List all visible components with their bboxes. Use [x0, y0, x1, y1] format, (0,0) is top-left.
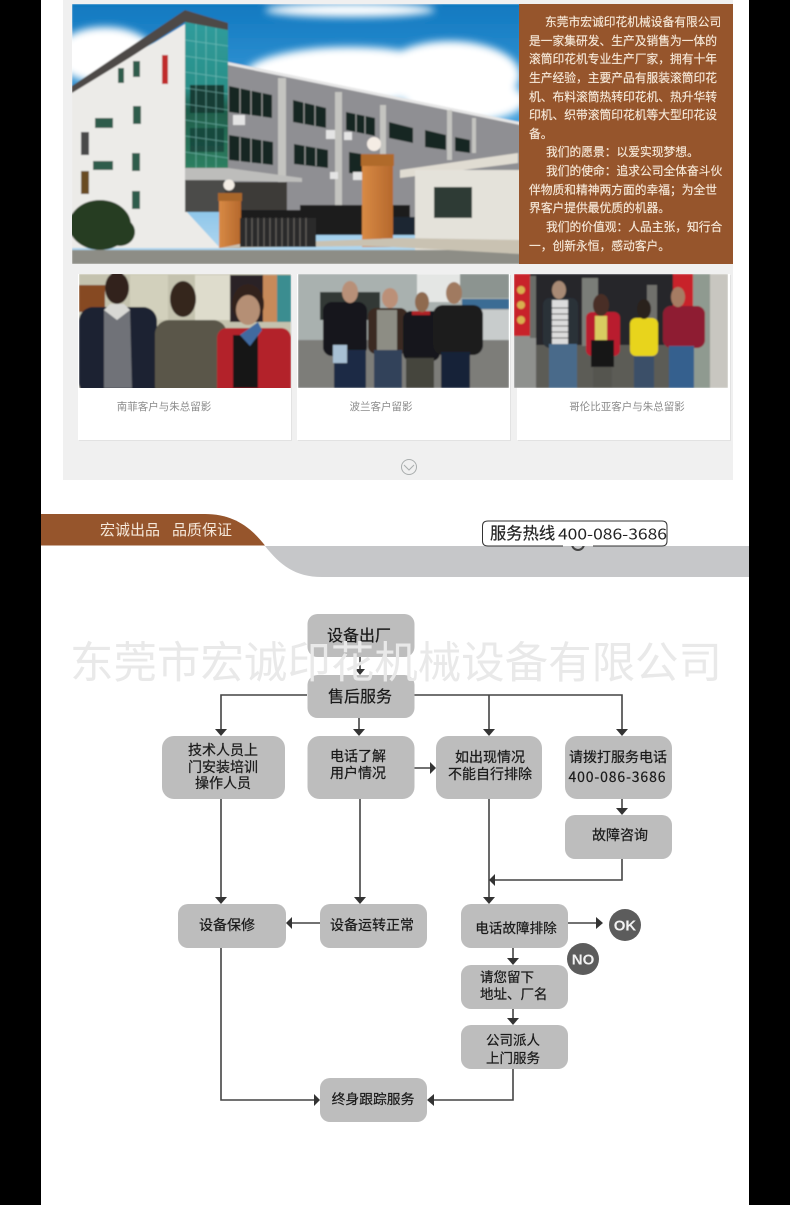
- step: call service line: 请拨打服务电话: [569, 749, 667, 765]
- flowchart: [162, 614, 672, 1122]
- panel: company text: 滚筒印花机专业生产厂家，拥有十年: [529, 52, 717, 66]
- step: fault consultation: [565, 815, 672, 859]
- step: on-site installation and training: 操作人员: [195, 775, 251, 791]
- photo: Poland customers: [298, 274, 509, 388]
- panel: company text: 生产经验，主要产品有服装滚筒印花: [529, 71, 717, 85]
- step: fault consultation: 故障咨询: [592, 827, 648, 843]
- panel: company text: 我们的价值观：人品主张，知行合: [546, 220, 722, 234]
- hotline box: 400-086-3686: [558, 524, 667, 544]
- card: South Africa customers: [78, 272, 292, 441]
- panel: company text: 印机、织带滚筒印花机等大型印花设: [529, 108, 717, 122]
- hotline box: 服务热线: [490, 525, 555, 543]
- banner: quality slogan: 品质保证: [172, 522, 232, 539]
- step: equipment warranty: [178, 904, 286, 948]
- step: call service line: 400-086-3686: [568, 767, 666, 787]
- step: unresolved problem: [436, 736, 542, 799]
- photo: South Africa customers: [79, 274, 291, 388]
- step: after-sales service: [308, 675, 414, 718]
- caption: South Africa: 南菲客户与朱总留影: [117, 400, 212, 413]
- icon: OK: [609, 909, 641, 941]
- step: phone check: [308, 736, 414, 799]
- photo: factory building: [55, 3, 525, 264]
- caption: Poland: 波兰客户留影: [350, 400, 413, 413]
- step: equipment running normally: [320, 904, 427, 948]
- panel: company text: 备。: [529, 127, 552, 141]
- card: Colombia customers: [514, 274, 731, 441]
- panel: company text: 机、布料滚筒热转印花机、热升华转: [529, 90, 717, 104]
- caption: Colombia: 哥伦比亚客户与朱总留影: [569, 400, 685, 413]
- photo: Colombia customers: [514, 274, 728, 388]
- step: leave address: 请您留下: [480, 969, 534, 985]
- step: equipment leaves factory: 设备出厂: [327, 627, 391, 645]
- step: lifetime tracking service: 终身跟踪服务: [332, 1092, 415, 1107]
- banner: quality slogan: [41, 514, 749, 577]
- step: leave address: [461, 965, 568, 1009]
- panel: company text: 我们的愿景：以爱实现梦想。: [546, 145, 699, 159]
- panel: company text: 伴物质和精神两方面的幸福；为全世: [529, 183, 717, 197]
- step: on-site installation and training: 技术人员上: [188, 742, 258, 758]
- panel: company text: 我们的使命：追求公司全体奋斗伙: [546, 164, 722, 178]
- panel: company text: 界客户提供最优质的机器。: [529, 201, 670, 215]
- step: unresolved problem: 不能自行排除: [448, 766, 532, 782]
- step: after-sales service: 售后服务: [328, 688, 392, 706]
- step: on-site dispatch: 上门服务: [486, 1051, 540, 1066]
- panel: company text: [519, 4, 733, 264]
- step: phone troubleshooting: [461, 904, 568, 948]
- panel: company text: 是一家集研发、生产及销售为一体的: [529, 34, 717, 48]
- step: equipment warranty: 设备保修: [199, 917, 255, 933]
- step: unresolved problem: 如出现情况: [455, 749, 525, 765]
- card: Poland customers: [297, 274, 511, 441]
- step: lifetime tracking service: [320, 1078, 427, 1122]
- connectors: [215, 657, 628, 1106]
- step: on-site dispatch: 公司派人: [486, 1033, 540, 1048]
- step: on-site installation and training: [162, 736, 285, 799]
- step: phone troubleshooting: 电话故障排除: [475, 921, 557, 936]
- step: phone check: 用户情况: [330, 765, 386, 781]
- step: leave address: 地址、厂名: [480, 987, 548, 1002]
- panel: company text: 一，创新永恒，感动客户。: [529, 239, 670, 253]
- watermark: 东莞市宏诚印花机械设备有限公司: [70, 640, 722, 688]
- step: equipment running normally: 设备运转正常: [330, 917, 414, 933]
- step: on-site installation and training: 门安装培训: [188, 759, 258, 775]
- step: call service line: [565, 736, 672, 799]
- panel: company intro: [55, 0, 733, 480]
- icon: OK: OK: [614, 918, 636, 934]
- icon: NO: NO: [572, 952, 595, 968]
- panel: company text: 东莞市宏诚印花机械设备有限公司: [545, 15, 721, 29]
- hotline box: [482, 521, 667, 550]
- step: phone check: 电话了解: [330, 748, 386, 764]
- step: equipment leaves factory: [308, 614, 414, 657]
- slogan: 宏诚出品: [100, 522, 160, 539]
- icon: NO: [567, 943, 599, 975]
- step: on-site dispatch: [461, 1025, 568, 1069]
- icon: scroll down: [402, 460, 416, 474]
